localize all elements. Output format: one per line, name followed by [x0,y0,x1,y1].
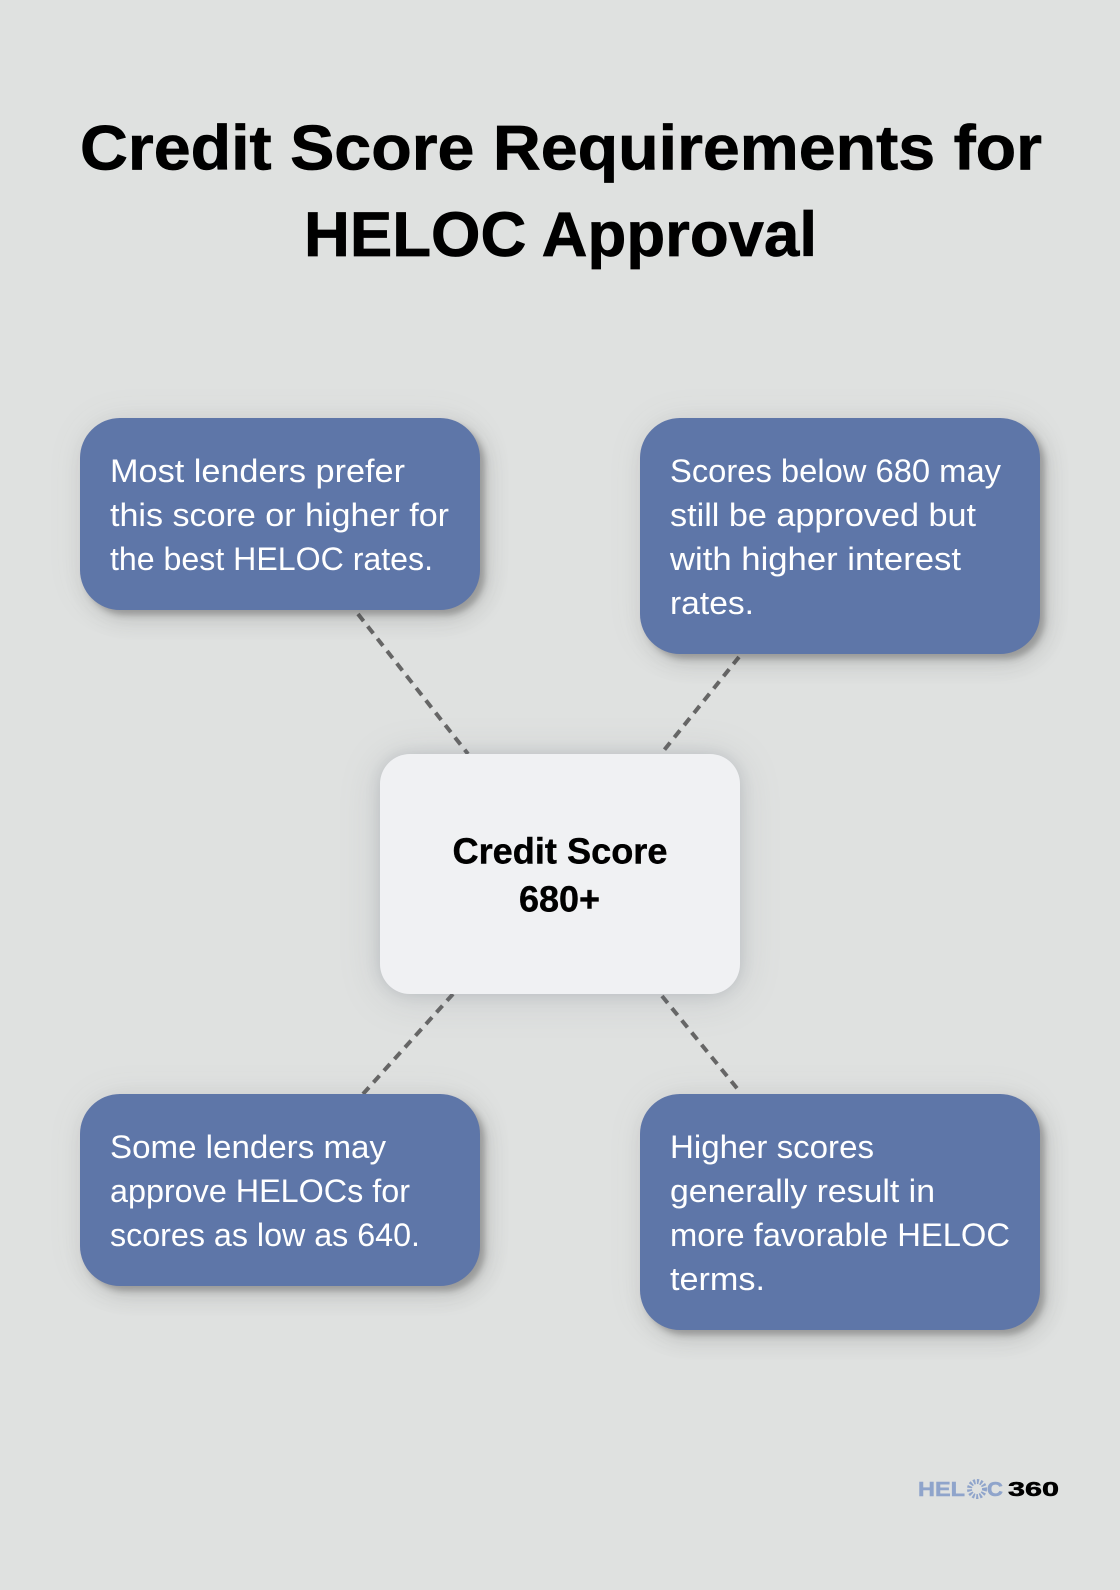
title: HELOC Approval [304,200,817,270]
panel: bottom left callout [80,1094,480,1286]
panel: bottom left callout: Some lenders may [110,1129,387,1165]
panel: top left callout: this score or higher for [110,497,449,533]
panel: top left callout: Most lenders prefer [110,453,405,489]
panel: bottom left callout: approve HELOCs for [110,1173,410,1209]
panel: top left callout: the best HELOC rates. [110,541,433,577]
panel: top right callout: rates. [670,585,754,621]
logo: HELOC360: C [987,1479,1003,1501]
panel: bottom right callout: generally result in [670,1173,935,1209]
panel: bottom right callout: terms. [670,1261,765,1297]
panel: top right callout: with higher interest [669,541,961,577]
logo: HELOC360: HEL [918,1479,965,1501]
panel: top right callout: still be approved but [670,497,976,533]
logo: HELOC360: 360 [1008,1479,1059,1501]
panel: bottom left callout: scores as low as 640. [110,1217,420,1253]
panel: center credit score: Credit Score [452,830,668,872]
logo: HELOC360 [918,1479,1059,1501]
title: Credit Score Requirements for [80,114,1042,184]
panel: bottom right callout: Higher scores [670,1129,874,1165]
panel: top left callout [80,418,480,610]
panel: top right callout: Scores below 680 may [670,453,1002,489]
panel: center credit score [380,754,740,994]
panel: top right callout [640,418,1040,654]
title [80,114,1042,270]
panel: bottom right callout [640,1094,1040,1330]
panel: center credit score: 680+ [519,878,600,920]
panel: bottom right callout: more favorable HELOC [670,1217,1010,1253]
